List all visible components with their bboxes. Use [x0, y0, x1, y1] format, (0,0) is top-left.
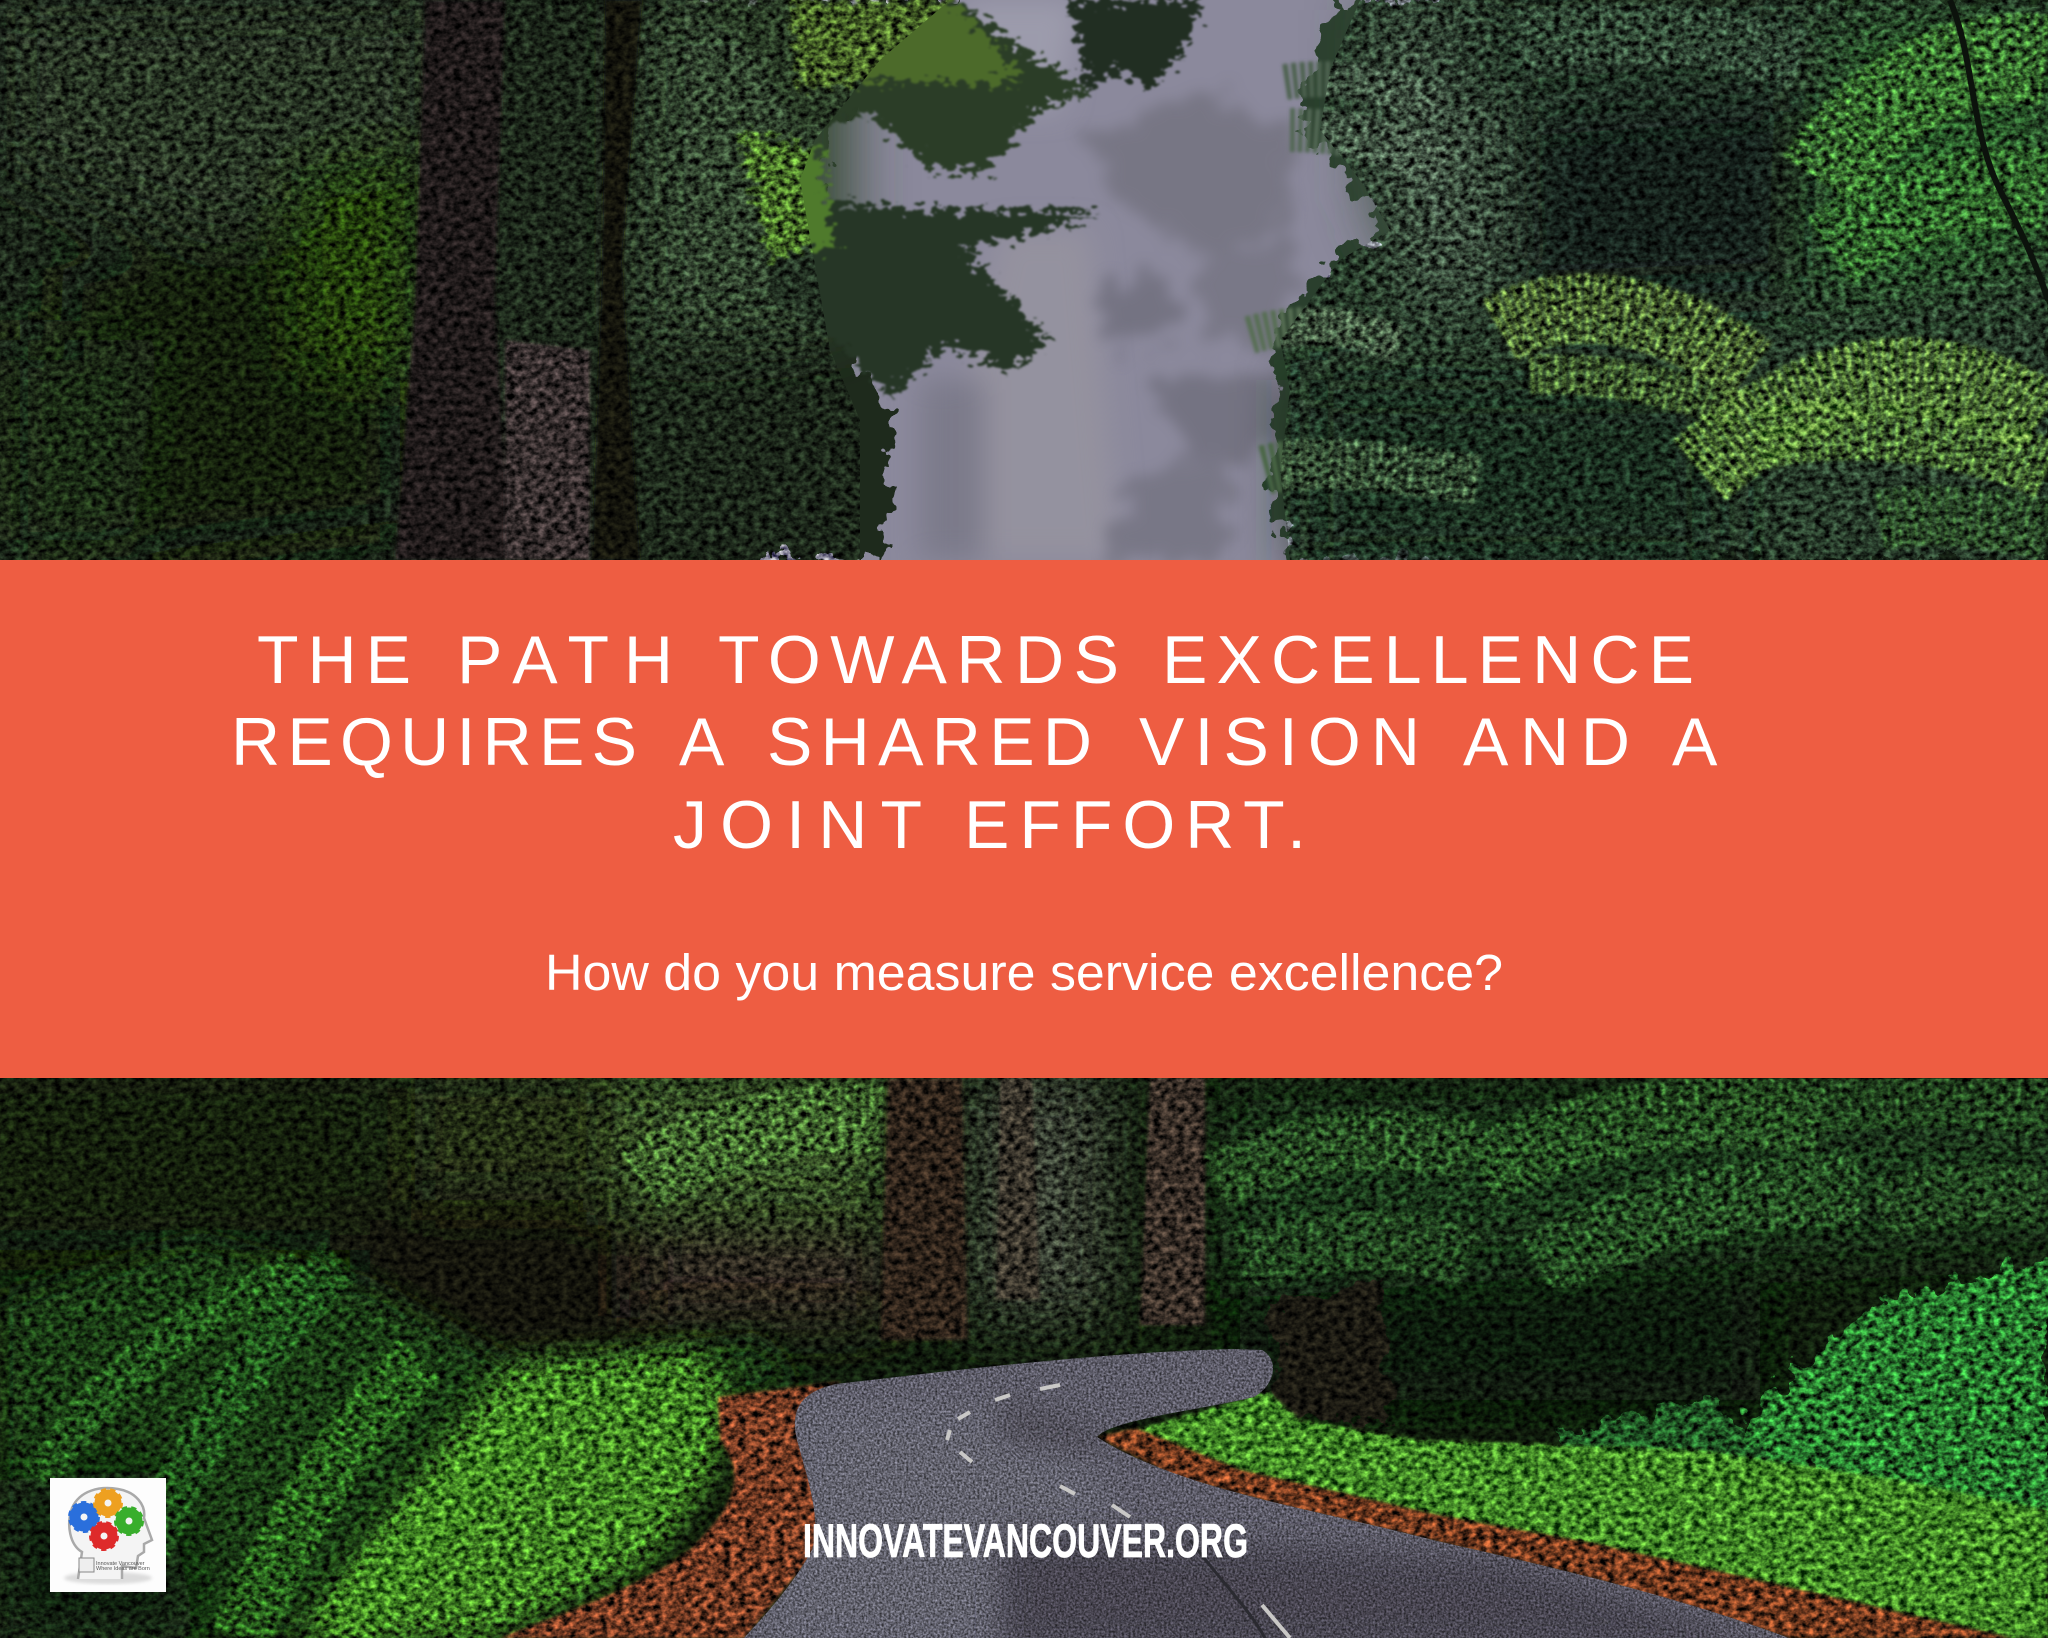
foliage texture [0, 0, 2048, 560]
logo wordmark [79, 1558, 150, 1572]
banner: coral band [0, 560, 2048, 1078]
photo: misty redwood forest canopy [0, 0, 2048, 570]
lavender fog in the forest clearing [700, 0, 1450, 560]
logo wordmark: Innovate Vancouver [96, 1561, 145, 1567]
right red dirt shoulder [1097, 1428, 2011, 1638]
distant misty tree [1090, 90, 1300, 560]
heading: line three [673, 787, 1306, 863]
green gear [116, 1508, 142, 1534]
hanging bough at the top centre [1068, 0, 1205, 92]
fir boughs against the fog [700, 0, 1205, 398]
sunlit tip on the left of the middle bough [740, 130, 835, 260]
winding asphalt road [700, 1340, 1800, 1638]
left red dirt shoulder [500, 1382, 840, 1638]
background forest tones [0, 1060, 2048, 1400]
heading: line two: REQUIRES [231, 704, 637, 780]
dark tree base beside the road [1275, 1280, 1390, 1420]
redwood trunks on the left [395, 0, 642, 560]
olive sunlit top of upper bough [790, 0, 1020, 90]
left forest mass [0, 0, 960, 560]
middle bough reaching into the fog [770, 190, 1100, 398]
heading: line one: THE [257, 622, 411, 698]
heading: line three: JOINT [673, 787, 922, 863]
right grass verge [1136, 1391, 2048, 1638]
heading: line two: AND [1463, 704, 1630, 780]
heading: line three: EFFORT. [964, 787, 1306, 863]
logo wordmark: Where Ideas are Born [96, 1566, 150, 1572]
logo: head with gears [50, 1478, 166, 1592]
fog highlights and shafts of light [920, 0, 1120, 560]
heading: line one: TOWARDS [718, 622, 1119, 698]
upper-left dark foliage [0, 0, 850, 560]
blue gear [70, 1503, 98, 1531]
website url: INNOVATEVANCOUVER.ORG [803, 1514, 1248, 1567]
mid-green boughs along the top [640, 1097, 2048, 1270]
left ferns and undergrowth [0, 1240, 800, 1638]
road centre markings [947, 1385, 1290, 1638]
upper bough [700, 0, 1090, 172]
heading: line two [231, 704, 1718, 780]
heading: line two: SHARED [767, 704, 1092, 780]
red gear [91, 1523, 117, 1549]
heading: line one: EXCELLENCE [1162, 622, 1694, 698]
bright green sunlit boughs on the right [1250, 34, 2048, 530]
redwood trunks in the distance [880, 1078, 1205, 1340]
heading: line two: VISION [1139, 704, 1420, 780]
heading: line two: A [679, 704, 725, 780]
road grain [700, 1340, 1800, 1638]
head silhouette [64, 1488, 152, 1584]
heading: line one: PATH [457, 622, 673, 698]
subheading question: How do you measure service excellence? [545, 944, 1503, 1001]
right forest mass [1265, 0, 2048, 560]
dark branch at upper right [1950, 0, 2048, 300]
right bright green bush [1560, 1260, 2048, 1520]
heading: line two: A [1672, 704, 1718, 780]
photo: forest with winding road [0, 1060, 2048, 1638]
heading: line one [257, 622, 1694, 698]
foliage texture [0, 1078, 2048, 1638]
orange gear [95, 1490, 121, 1516]
